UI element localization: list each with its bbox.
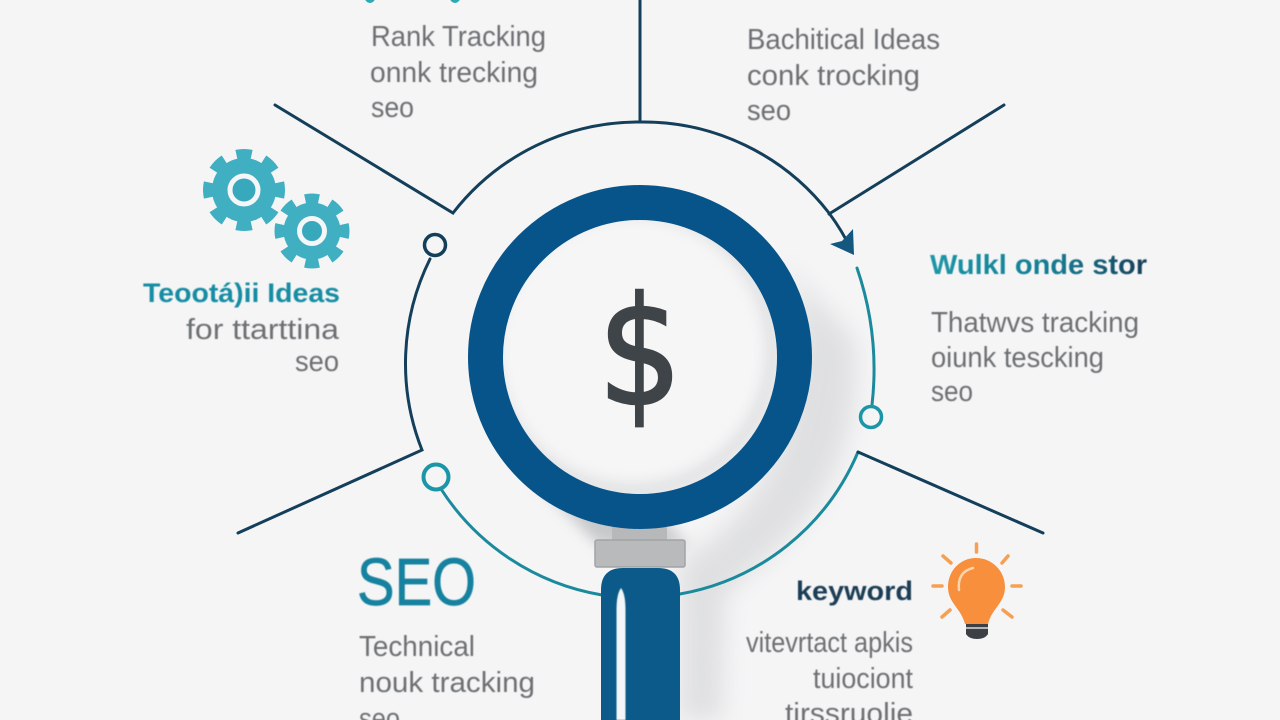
heading: Teootá)ii Ideas xyxy=(143,278,340,308)
lens ring xyxy=(486,202,794,512)
lower right teal arc xyxy=(680,452,858,594)
block: Rank Tracking: onnk trecking xyxy=(370,57,538,89)
arrow head xyxy=(830,229,854,255)
lower left teal arc xyxy=(441,489,602,595)
right teal node xyxy=(860,406,882,428)
handle neck xyxy=(612,526,667,542)
block: SEO: nouk tracking xyxy=(359,667,535,699)
block: Technical Ideas: seo xyxy=(295,346,339,378)
block: Wulkl onde stor: Thatwvs tracking xyxy=(931,307,1139,339)
block: Wulkl onde stor: seo xyxy=(931,376,973,408)
block: Bachitical Ideas: seo xyxy=(747,95,791,127)
right shadow xyxy=(680,260,856,720)
block: Wulkl onde stor: oiunk tescking xyxy=(931,342,1104,374)
magnifying glass xyxy=(486,202,794,720)
right teal arc xyxy=(857,268,874,405)
block: Bachitical Ideas: Bachitical Ideas xyxy=(747,24,940,56)
block: SEO xyxy=(357,545,535,720)
bulb base xyxy=(966,624,988,639)
left dark arc xyxy=(238,259,430,533)
block: SEO: Technical xyxy=(359,631,475,663)
block: Rank Tracking: seo xyxy=(371,92,414,124)
small gear xyxy=(280,199,344,263)
vertical top connector xyxy=(638,0,642,122)
block: keyword: vitevrtact apkis xyxy=(746,627,913,659)
large gear xyxy=(209,155,279,225)
block: Bachitical Ideas: conk trocking xyxy=(747,60,920,92)
block: Technical Ideas xyxy=(143,278,340,378)
keyword heading: keyword xyxy=(796,576,913,606)
handle xyxy=(601,568,680,720)
block: keyword: tuiociont xyxy=(813,663,913,695)
block: keyword xyxy=(746,576,913,720)
block: Wulkl onde stor xyxy=(930,249,1147,408)
bulb highlight xyxy=(959,568,973,590)
top dark arc with left connector xyxy=(275,105,852,251)
handle collar xyxy=(595,540,685,567)
heading: Wulkl onde stor xyxy=(930,249,1147,280)
connector lines and ring xyxy=(238,0,1043,595)
lens inner shading xyxy=(491,209,773,491)
top cropped dots xyxy=(365,0,460,3)
icon: light bulb xyxy=(933,544,1021,639)
icon: gears xyxy=(209,155,344,263)
block: Technical Ideas: for ttarttina xyxy=(186,314,340,346)
left dark node xyxy=(424,234,446,256)
bulb glass xyxy=(948,558,1005,624)
lower left teal node xyxy=(424,464,448,490)
handle highlight xyxy=(616,588,626,720)
block: Rank Tracking: Rank Tracking xyxy=(371,21,546,53)
glass cast shadows xyxy=(535,260,856,720)
dollar sign: $ xyxy=(598,266,682,440)
lower left shadow xyxy=(535,480,690,545)
block: Bachitical Ideas xyxy=(747,24,940,127)
upper right connector xyxy=(829,105,1004,214)
rays xyxy=(933,544,1021,617)
lower right connector xyxy=(858,452,1043,533)
SEO heading: SEO xyxy=(357,545,476,620)
block: Rank Tracking xyxy=(370,21,546,124)
